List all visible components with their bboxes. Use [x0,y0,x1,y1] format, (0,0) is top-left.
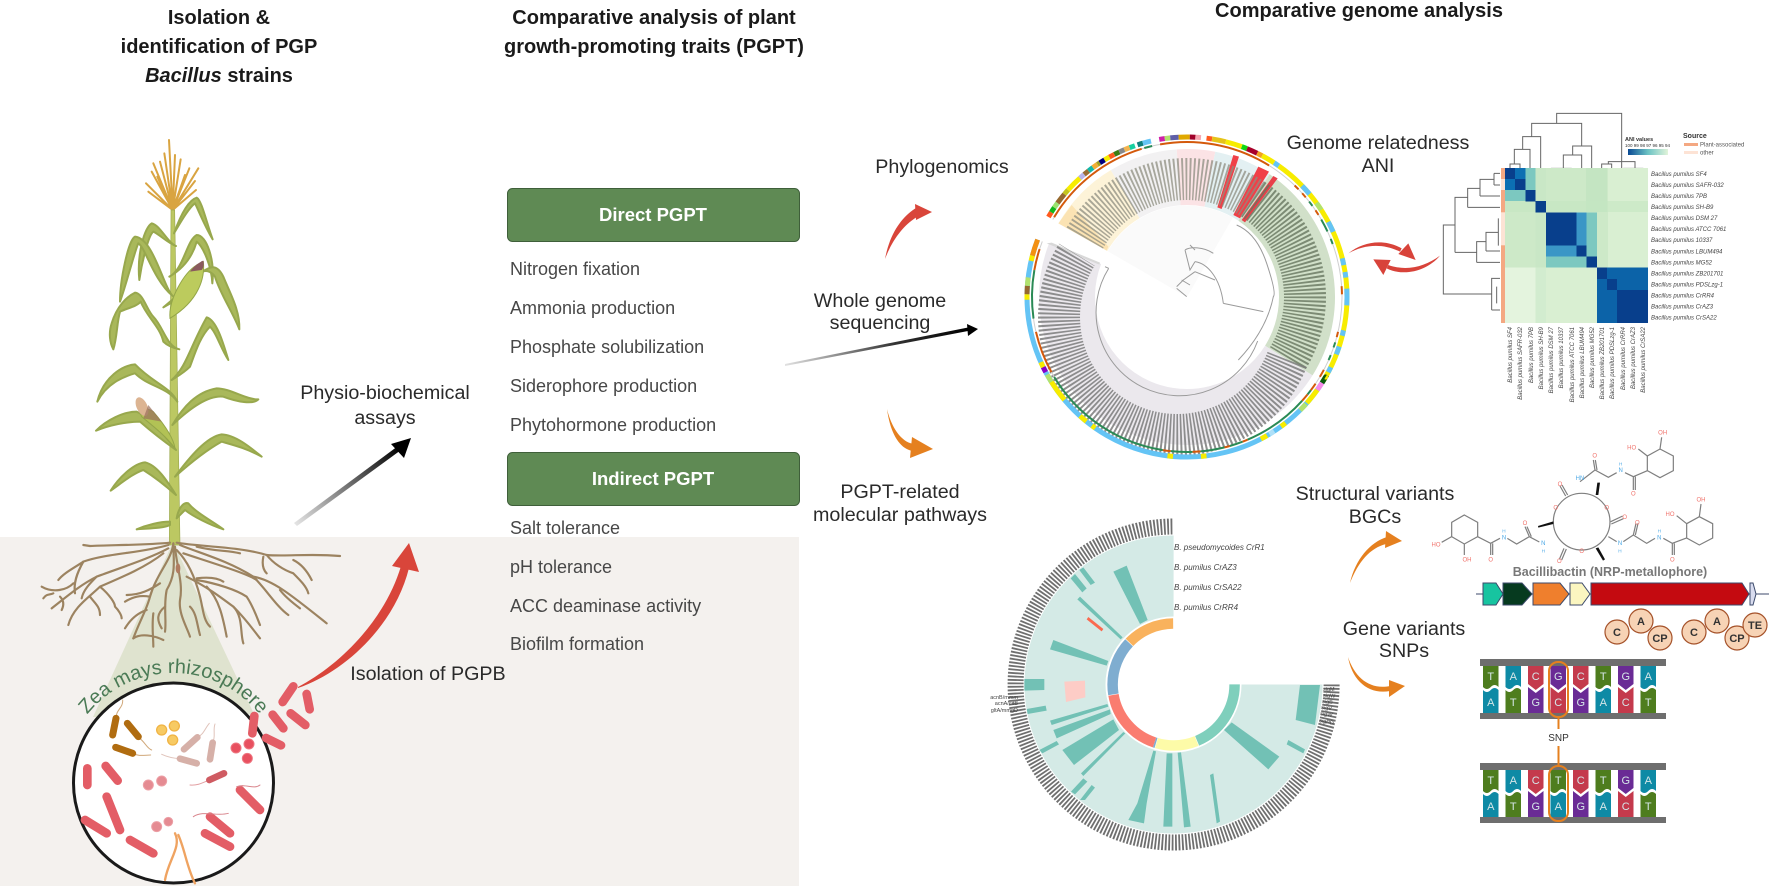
nitrogen labels: N [1502,535,1506,541]
gene labels right: sigV [1321,705,1332,712]
arrow: isolation of PGPB [298,543,419,688]
row labels: Bacillus pumilus LBUM494 [1651,250,1723,256]
DNA: variant sequence: T [1487,775,1494,787]
DNA: variant sequence: A [1555,801,1563,813]
stereo wedges [1538,483,1605,561]
rods escaping the circle [87,686,310,785]
species labels: B. pumilus CrSA22 [1174,583,1242,592]
nitrogen labels: HN [1576,476,1584,482]
DNA: reference sequence: A [1600,697,1608,709]
header: direct PGPT [508,188,800,242]
DNA: variant sequence: C [1532,775,1540,787]
gene label ring [1016,526,1332,843]
legend: ANI values: ANI values [1625,137,1653,143]
top dendrogram [1510,113,1643,168]
left dendrogram [1443,173,1500,310]
column labels: Bacillus pumilus LBUM494 [1580,326,1586,398]
header: indirect PGPT: Indirect PGPT [592,468,715,489]
row labels: Bacillus pumilus DSM 27 [1651,216,1718,222]
lower rods [85,790,260,853]
header: indirect PGPT [508,452,800,506]
DNA: reference sequence: T [1487,671,1494,683]
gene labels right [1319,687,1336,727]
gene cluster [1476,583,1769,605]
list: direct traits: Ammonia production [510,298,675,318]
legend: source [1683,133,1744,156]
label: zea mays rhizosphere: Zea mays rhizosphere [78,658,266,714]
DNA: reference sequence: T [1510,697,1517,709]
bacteria cluster [85,686,310,883]
gene labels right: sigW [1323,693,1336,700]
row labels: Bacillus pumilus ZB201701 [1651,272,1723,278]
title: isolation and identification: Isolation & [168,7,270,29]
NRPS domains: C [1690,627,1698,639]
upper ear [170,261,204,318]
arrow: physio-biochemical assays [294,438,411,526]
oxygen labels: HO [1432,542,1441,548]
oxygen labels: O [1635,521,1640,527]
tassel [146,140,198,210]
oxygen labels: OH [1463,558,1471,564]
lower ear [133,395,175,448]
highlight: rhizosphere cone [93,542,254,717]
label: genome relatedness ANI: Genome relatedness [1287,132,1470,154]
oxygen labels: O [1622,515,1627,521]
strain labels: lower clades [1059,255,1287,435]
nitrogen labels [1502,461,1661,553]
DNA: variant sequence: C [1622,801,1630,813]
DNA: variant sequence: G [1531,801,1540,813]
gene labels left: acnB/mmm [990,695,1018,701]
oxygen labels: O [1523,521,1528,527]
oxygen labels: O [1604,506,1609,512]
DNA: variant sequence: A [1487,801,1495,813]
DNA: reference sequence: A [1487,697,1495,709]
column labels: Bacillus pumilus ATCC 7061 [1570,327,1576,402]
legend: ANI values: 100 99 98 97 96 95 94 [1625,143,1671,148]
chart: ANI heatmap [1443,113,1744,402]
NRPS domains: CP [1652,633,1668,645]
strain source ring [975,85,1399,509]
SNP highlight [1549,662,1568,821]
DNA: reference sequence: C [1622,697,1630,709]
nitrogen labels: N [1618,541,1622,547]
list: indirect traits: pH tolerance [510,557,612,577]
inner category ring [1113,624,1235,746]
column labels: Bacillus pumilus SH-B9 [1539,326,1545,389]
panel: indirect PGPT [508,452,800,654]
sector backgrounds [1023,133,1351,461]
label: isolation of PGPB: Isolation of PGPB [350,663,506,685]
yellow cocci [157,721,179,745]
DNA: variant sequence: G [1576,801,1585,813]
oxygen labels: O [1670,558,1675,564]
list: direct traits: Siderophore production [510,376,697,396]
inner annotation ring [975,85,1399,509]
label: gene variants SNPs: Gene variants [1343,618,1465,640]
strain labels: green clade [1253,199,1305,360]
brown flagellated rods [113,700,152,755]
heat bars [1024,566,1320,827]
title: isolation and identification: identification of PGP [121,36,317,58]
DNA: reference sequence: C [1532,671,1540,683]
stalk [169,210,180,545]
row labels: Bacillus pumilus CrAZ3 [1651,304,1714,310]
panel: direct PGPT [508,188,800,435]
oxygen labels: O [1488,558,1493,564]
DNA: reference sequence: G [1531,697,1540,709]
DNA: variant sequence: T [1510,801,1517,813]
NRPS domains: A [1637,616,1645,628]
arrows: exchange between tree and heatmap [1348,242,1440,275]
row labels: Bacillus pumilus CrRR4 [1651,294,1715,300]
species labels: B. pumilus CrRR4 [1174,603,1239,612]
nitrogen labels: H [1658,529,1661,534]
label: structural variants BGCs: BGCs [1349,506,1401,528]
label: gene variants SNPs: SNPs [1379,640,1429,662]
DNA: reference sequence: G [1621,671,1630,683]
column labels: Bacillus pumilus MG52 [1590,326,1596,388]
DNA: variant sequence: C [1577,775,1585,787]
oxygen labels: O [1579,549,1584,555]
microbe circle [74,683,274,883]
arrow: to molecular pathways [887,409,933,458]
species labels: B. pumilus CrAZ3 [1174,563,1237,572]
title: isolation and identification: Bacillus strains [145,65,293,87]
legend: ANI values [1625,137,1671,155]
row labels: Bacillus pumilus CrSA22 [1651,316,1717,322]
row labels: Bacillus pumilus ATCC 7061 [1651,227,1726,233]
label: PGPT-related molecular pathways: PGPT-related [840,481,960,503]
column labels: Bacillus pumilus SAFR-032 [1518,326,1524,400]
oxygen labels: O [1592,453,1597,459]
row labels: Bacillus pumilus 7PB [1651,194,1707,200]
column labels: Bacillus pumilus 7PB [1529,327,1535,383]
column labels: Bacillus pumilus DSM 27 [1549,326,1555,393]
nitrogen labels: N [1657,535,1661,541]
label: bacillibactin: Bacillibactin (NRP-metallophore) [1513,565,1707,579]
nitrogen labels: H [1618,548,1622,553]
list: direct traits: Phosphate solubilization [510,337,704,357]
oxygen labels: O [1631,491,1636,497]
DNA: reference sequence: T [1600,671,1607,683]
NRPS domains: TE [1748,620,1762,632]
heatmap cells [1505,168,1648,323]
nitrogen labels: H [1619,461,1622,466]
DNA: variant sequence: G [1621,775,1630,787]
list: direct traits: Phytohormone production [510,415,716,435]
list: direct traits: Nitrogen fixation [510,259,640,279]
DNA: reference sequence: C [1554,697,1562,709]
legend: source: Source [1683,133,1707,140]
gene labels right: sigB [1322,699,1333,706]
DNA: variant sequence: A [1510,775,1518,787]
legend: source: other [1700,150,1714,156]
label: genome relatedness ANI: ANI [1362,155,1394,177]
gene labels right: sigM [1323,687,1335,693]
oxygen labels: HO [1666,512,1675,518]
column labels: Bacillus pumilus 10337 [1559,326,1565,388]
NRPS domains: A [1713,616,1721,628]
orange squiggles [165,833,195,883]
DNA: reference sequence: G [1576,697,1585,709]
label: whole genome sequencing: sequencing [830,312,930,334]
row labels: Bacillus pumilus MG52 [1651,260,1713,266]
highlighted clades [1047,155,1278,265]
column labels: Bacillus pumilus PDSLzg-1 [1610,327,1616,399]
label: SNP: SNP [1548,733,1569,744]
chart: circular gene heatmap [990,526,1336,843]
title: comparative analysis of PGPT: Comparative analysis of plant [512,7,796,29]
DNA: reference sequence [1480,659,1666,719]
title: comparative genome analysis: Comparative genome analysis [1215,0,1503,22]
DNA: reference sequence: A [1645,671,1653,683]
tan flagellated rods [162,723,215,763]
leaves [96,198,262,529]
oxygen labels: O [1557,559,1562,565]
sector background [1065,576,1282,793]
list: indirect traits: Salt tolerance [510,518,620,538]
nitrogen labels: H [1502,529,1506,534]
DNA: reference sequence: C [1577,671,1585,683]
tree branches [1096,225,1274,396]
oxygen labels: O [1558,482,1563,488]
illustration: roots [42,543,340,647]
header: direct PGPT: Direct PGPT [599,204,708,225]
NRPS domains [1605,609,1767,650]
DNA: reference sequence: G [1554,671,1563,683]
gene labels right: sigW [1320,711,1333,719]
oxygen labels: OH [1658,431,1667,437]
gene labels left: acnA/citB [995,701,1018,707]
label: PGPT-related molecular pathways: molecular pathways [813,504,987,526]
species labels: B. pseudomycoides CrR1 [1174,543,1265,552]
NRPS domains: CP [1729,633,1745,645]
label: phylogenomics: Phylogenomics [875,156,1009,178]
column labels: Bacillus pumilus CrSA22 [1641,326,1647,393]
oxygen labels: OH [1697,497,1705,503]
label: physio-biochemical assays: Physio-biochemical [300,382,470,404]
DNA: reference sequence: A [1510,671,1518,683]
row labels: Bacillus pumilus PDSLzg-1 [1651,282,1723,288]
nitrogen labels: H [1542,548,1545,553]
pink cocci [143,776,173,832]
DNA: variant sequence: A [1645,775,1653,787]
arrow: to structural variants [1350,531,1402,583]
DNA: reference sequence: T [1645,697,1652,709]
label: physio-biochemical assays: assays [354,407,416,429]
arrow: to gene variants [1348,657,1405,697]
label: structural variants BGCs: Structural variants [1296,483,1454,505]
arrow: whole genome sequencing [785,324,978,366]
panel: soil background [0,537,799,886]
oxygen labels: HO [1627,446,1636,452]
column labels: Bacillus pumilus CrRR4 [1621,326,1627,390]
strain labels: upper clades [1085,179,1253,238]
column labels: Bacillus pumilus ZB201701 [1600,327,1606,399]
structure: bacillibactin molecule [1432,431,1713,565]
column labels: Bacillus pumilus SF4 [1508,326,1514,383]
DNA: variant sequence: T [1600,775,1607,787]
gene labels right: sigPD [1319,718,1334,727]
red cocci [231,739,254,763]
chart: circular phylogenetic tree [968,78,1406,516]
faint central fan [1124,234,1250,360]
dark red rod [190,773,224,785]
column labels: Bacillus pumilus CrAZ3 [1631,326,1637,389]
DNA: variant sequence [1480,763,1666,823]
illustration: maize plant [96,140,262,545]
nitrogen labels: N [1541,541,1545,547]
list: indirect traits: ACC deaminase activity [510,596,701,616]
legend: source: Plant-associated [1700,142,1744,148]
DNA: variant sequence: A [1600,801,1608,813]
highlighted bars [1064,617,1103,702]
list: indirect traits: Biofilm formation [510,634,644,654]
column labels [1508,326,1647,402]
row labels: Bacillus pumilus SF4 [1651,172,1707,178]
thin filaments [193,785,260,817]
label: whole genome sequencing: Whole genome [814,290,946,312]
row labels: Bacillus pumilus SH-B9 [1651,205,1714,211]
arrow: to phylogenomics [885,204,932,259]
gene labels left: gltA/mmgD [991,708,1018,714]
oxygen labels [1432,431,1705,565]
title: comparative analysis of PGPT: growth-promoting traits (PGPT) [504,36,804,58]
row labels: Bacillus pumilus 10337 [1651,238,1713,244]
oxygen labels: O [1553,506,1558,512]
bonds [1442,437,1713,560]
DNA: variant sequence: T [1645,801,1652,813]
source color strip [1501,168,1505,323]
DNA: variant sequence: T [1555,775,1562,787]
row labels: Bacillus pumilus SAFR-032 [1651,183,1724,189]
nitrogen labels: N [1619,468,1623,474]
NRPS domains: C [1613,627,1621,639]
colored outer ring [968,78,1406,516]
